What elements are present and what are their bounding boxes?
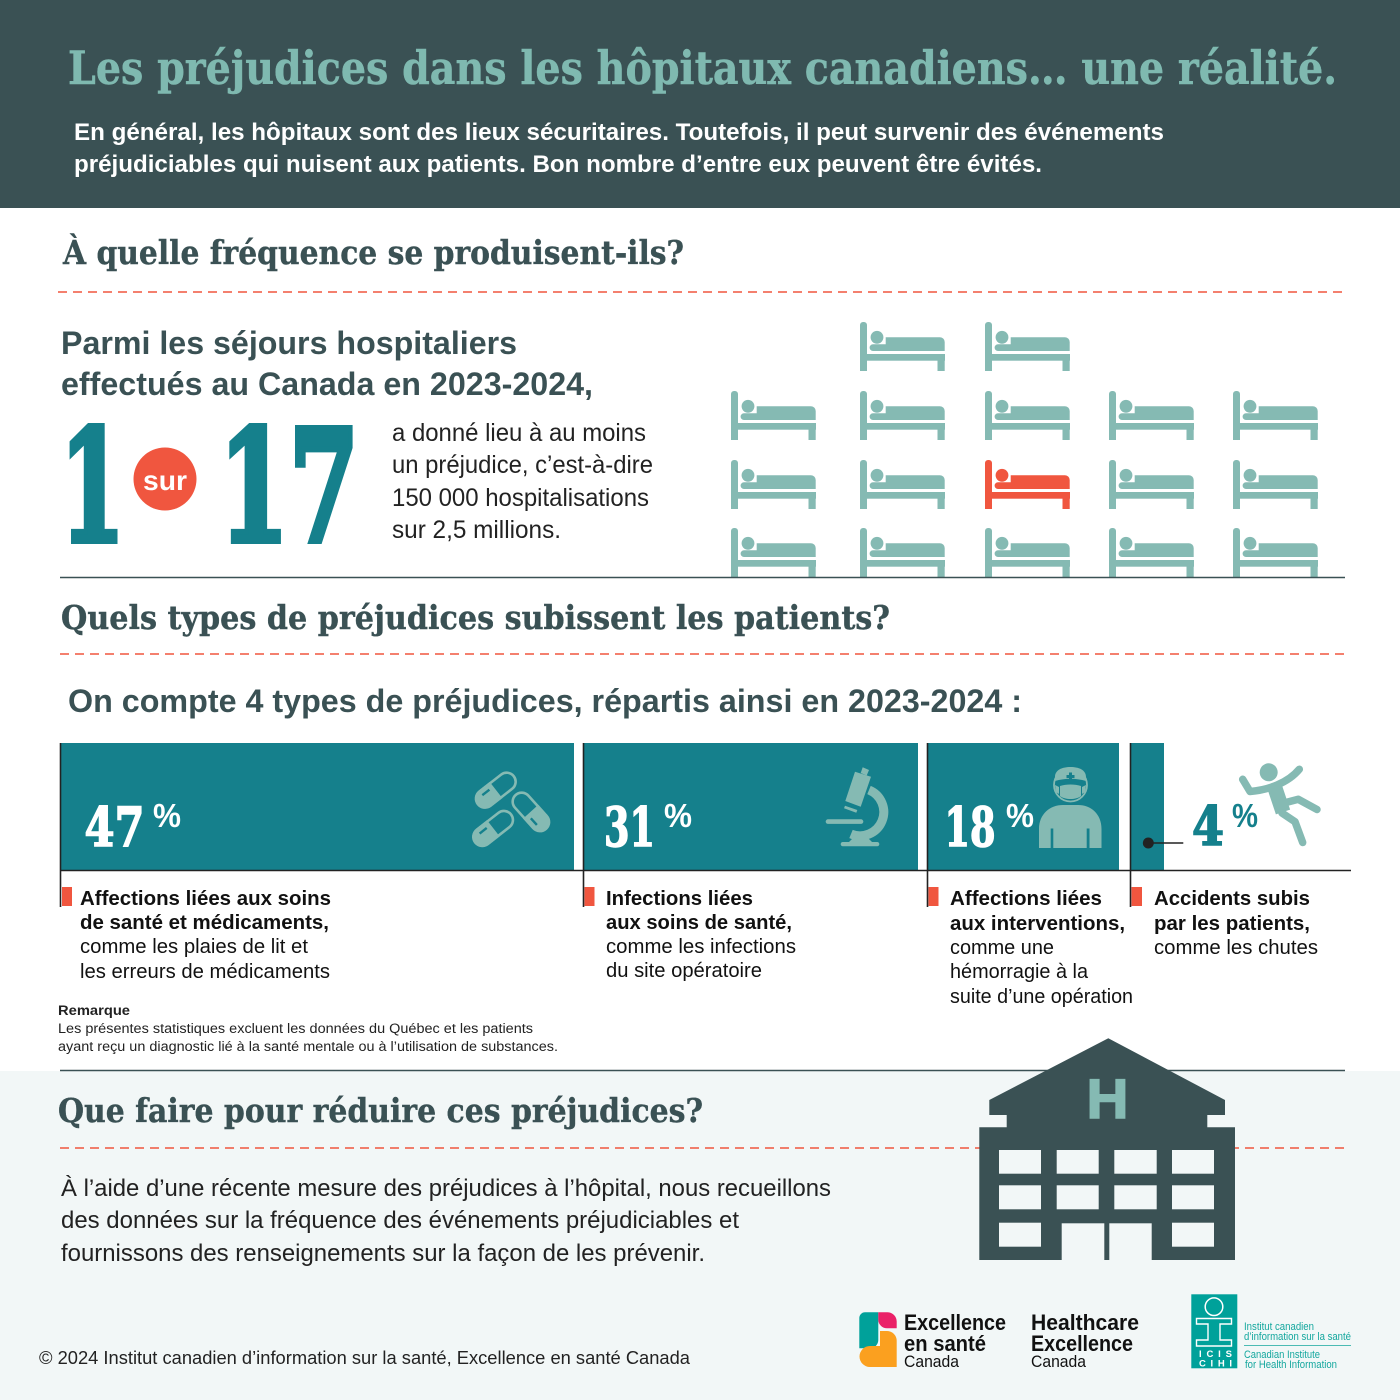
logo: Healthcare Excellence Canada: Excellence [1031, 1331, 1133, 1356]
text: statistic explanation [392, 419, 653, 544]
label: 18 percent: Affections liées [950, 888, 1102, 910]
label: 47 percent: de santé et médicaments, [80, 912, 329, 934]
intro text: En général, les hôpitaux sont des lieux sécuritaires. Toutefois, il peut survenir des événements [74, 119, 1164, 146]
logo: CIHI: CIHI [1199, 1358, 1232, 1370]
bar: 31 percent: % [664, 797, 692, 834]
logo: Excellence en santé Canada: Canada [904, 1352, 959, 1371]
label: 31 percent [584, 887, 796, 982]
label: 18 percent [928, 887, 1133, 1008]
copyright: © 2024 Institut canadien d’information sur la santé, Excellence en santé Canada [39, 1348, 691, 1368]
note [58, 1003, 558, 1054]
panel: what to do [0, 1038, 1400, 1400]
text: statistic explanation: sur 2,5 millions. [392, 516, 561, 544]
logo: CIHI: d’information sur la santé [1244, 1331, 1351, 1343]
heading: frequency: À quelle fréquence se produisent-ils? [62, 232, 684, 272]
text: statistic explanation: 150 000 hospitalisations [392, 484, 649, 512]
logo: CIHI: Institut canadien [1244, 1321, 1314, 1333]
text: statistic explanation: a donné lieu à au moins [392, 419, 646, 447]
statistic: 1 in 17: sur [143, 465, 187, 496]
bar: 18 percent: 18 [944, 795, 996, 859]
text: measure description: À l’aide d’une récente mesure des préjudices à l’hôpital, nous recueillons [61, 1175, 831, 1202]
note: Les présentes statistiques excluent les données du Québec et les patients [58, 1021, 533, 1036]
icon grid: beds [731, 322, 1318, 577]
logo: Healthcare Excellence Canada [1031, 1310, 1139, 1371]
label: 47 percent: Affections liées aux soins [80, 888, 331, 910]
label: 18 percent: hémorragie à la [950, 961, 1089, 983]
logo: CIHI: Canadian Institute [1244, 1349, 1320, 1361]
logo: Healthcare Excellence Canada: Healthcare [1031, 1310, 1139, 1335]
icon: pills [468, 768, 555, 851]
intro text [74, 119, 1164, 178]
label: 47 percent: comme les plaies de lit et [80, 936, 308, 958]
label: 31 percent: aux soins de santé, [606, 912, 792, 934]
bar: 31 percent [584, 743, 918, 871]
logo: Excellence en santé Canada: Excellence [904, 1310, 1006, 1335]
bar: 47 percent: % [153, 797, 181, 834]
bar: 4 percent: 4 [1192, 794, 1224, 858]
label: 4 percent: par les patients, [1154, 913, 1310, 935]
bar: 18 percent: % [1006, 797, 1034, 834]
logo: CIHI: for Health Information [1245, 1359, 1337, 1371]
text: measure description [61, 1175, 831, 1267]
label: 18 percent: suite d’une opération [950, 986, 1133, 1008]
label: 47 percent: les erreurs de médicaments [80, 961, 330, 983]
bar: 4 percent: % [1232, 797, 1258, 834]
label: 31 percent: comme les infections [606, 936, 796, 958]
lead text: hospital stays: effectués au Canada en 2023-2024, [61, 366, 593, 402]
header banner [0, 0, 1400, 208]
label: 31 percent: Infections liées [606, 888, 753, 910]
statistic: 1 in 17: 1 [60, 395, 125, 578]
icon: falling person [1243, 763, 1317, 842]
lead text: hospital stays: Parmi les séjours hospitaliers [61, 325, 517, 361]
label: 4 percent [1132, 887, 1318, 959]
label: 47 percent [62, 887, 331, 983]
note: Remarque [58, 1003, 131, 1018]
bar: 47 percent [61, 743, 574, 871]
text: statistic explanation: un préjudice, c’est-à-dire [392, 451, 653, 479]
logo: Excellence en santé Canada: en santé [904, 1331, 986, 1356]
logo: Healthcare Excellence Canada: Canada [1031, 1352, 1086, 1371]
icon: microscope [826, 767, 884, 846]
logo: Excellence en santé Canada [859, 1310, 1006, 1371]
icon: highlighted red bed [985, 460, 1070, 509]
icon: hospital: H [1086, 1067, 1128, 1130]
label: 18 percent: aux interventions, [950, 913, 1125, 935]
icon: hospital [979, 1038, 1235, 1260]
label: 4 percent: Accidents subis [1154, 888, 1310, 910]
lead text: hospital stays [61, 325, 593, 402]
bar: 4 percent [1131, 743, 1317, 871]
intro text: préjudiciables qui nuisent aux patients. Bon nombre d’entre eux peuvent être évités. [74, 151, 1042, 178]
heading: reduce harm: Que faire pour réduire ces préjudices? [58, 1091, 703, 1130]
label: 4 percent: comme les chutes [1154, 937, 1318, 959]
statistic: 1 in 17: 17 [219, 395, 359, 578]
bar: 18 percent [928, 743, 1119, 871]
logo: CIHI [1191, 1294, 1351, 1371]
note: ayant reçu un diagnostic lié à la santé mentale ou à l’utilisation de substances. [58, 1039, 558, 1054]
label: 31 percent: du site opératoire [606, 960, 762, 982]
label: 18 percent: comme une [950, 937, 1054, 959]
logo: CIHI: ICIS [1199, 1349, 1232, 1360]
text: measure description: des données sur la fréquence des événements préjudiciables et [61, 1207, 739, 1234]
bar: 47 percent: 47 [84, 795, 144, 859]
statistic: 1 in 17 [60, 395, 359, 578]
lead text: four types: On compte 4 types de préjudices, répartis ainsi en 2023-2024 : [68, 683, 1022, 719]
text: measure description: fournissons des renseignements sur la façon de les prévenir. [61, 1240, 705, 1267]
bar: 31 percent: 31 [604, 795, 655, 859]
heading: types of harm: Quels types de préjudices subissent les patients? [61, 598, 890, 637]
icon: surgeon [1039, 767, 1102, 848]
